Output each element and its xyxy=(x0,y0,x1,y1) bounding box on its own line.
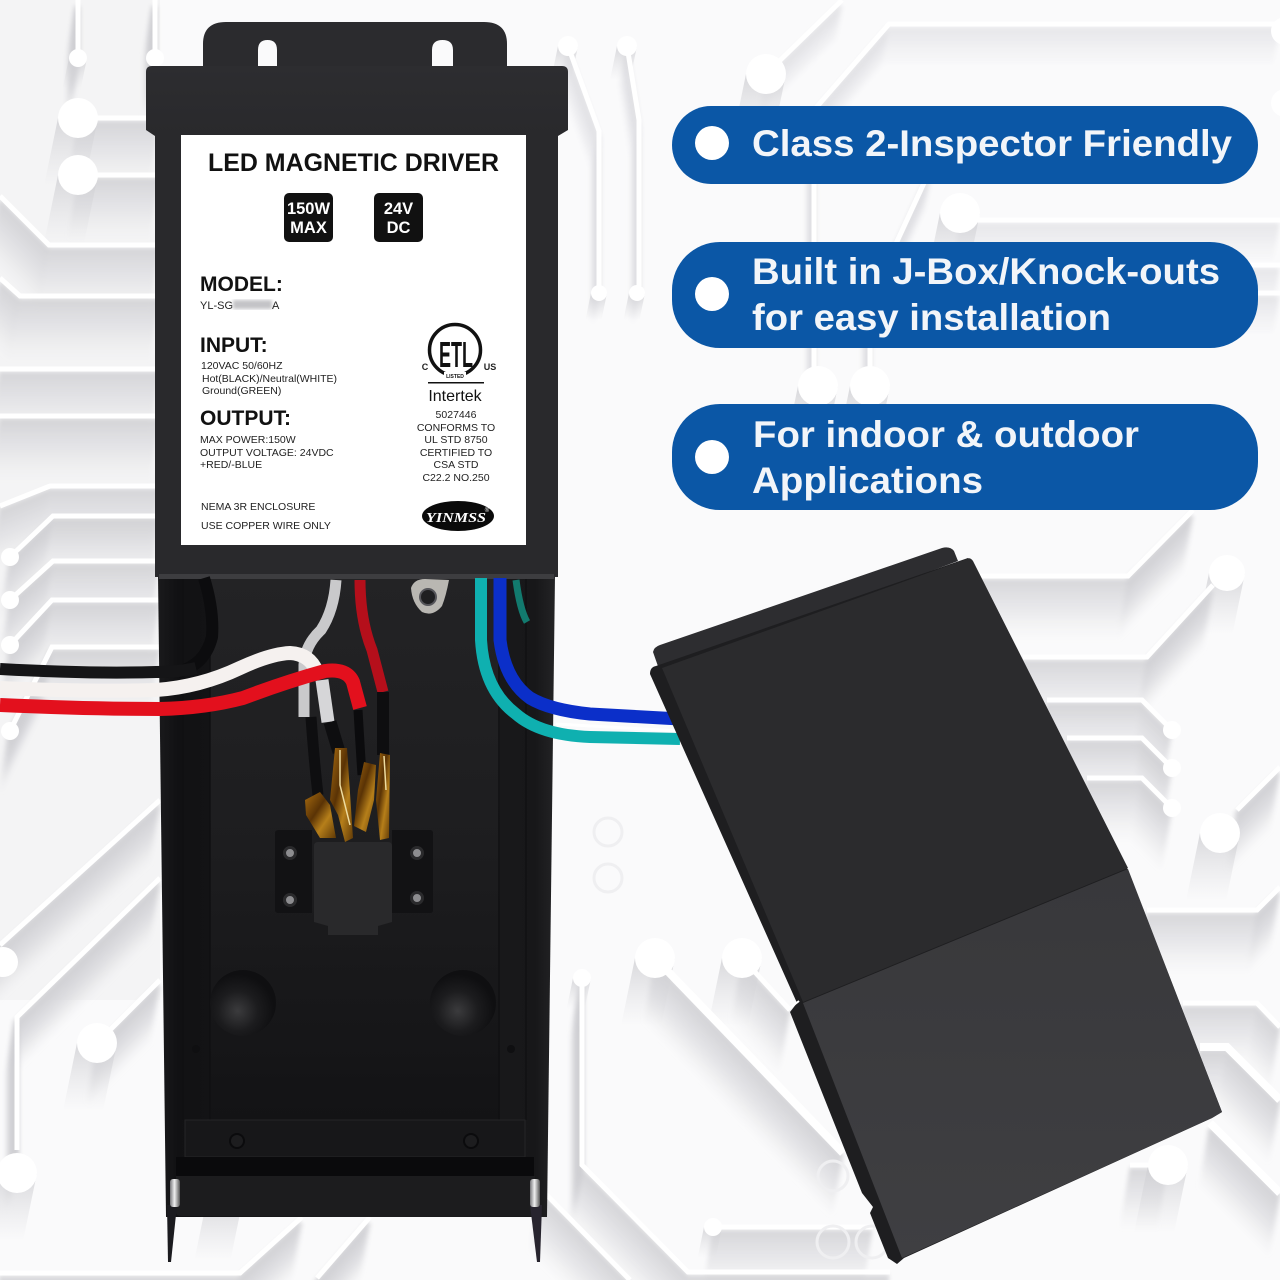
output block: +RED/-BLUE xyxy=(200,459,262,471)
model block: MODEL: xyxy=(200,273,283,296)
dimple right xyxy=(430,970,496,1036)
pill: For indoor and outdoor: Applications xyxy=(752,460,983,501)
badge: 150W max xyxy=(284,193,333,242)
lid upper panel xyxy=(662,558,1128,1002)
red wire xyxy=(0,670,360,709)
detached lid xyxy=(650,547,1222,1264)
ETL mark xyxy=(422,324,496,405)
Yinmss logo: ® xyxy=(485,507,490,514)
input block: Hot(BLACK)/Neutral(WHITE) xyxy=(202,373,337,385)
lid lower panel xyxy=(803,869,1222,1258)
pill: Built in J-Box/Knock-outs: Built in J-Box/Knock-outs xyxy=(752,251,1220,292)
certification text: UL STD 8750 xyxy=(424,434,488,446)
ETL mark: Intertek xyxy=(428,388,483,405)
input wires inside housing xyxy=(178,578,383,795)
lid side edge xyxy=(650,558,1222,1264)
model block xyxy=(200,273,283,312)
gold insulated crimps xyxy=(305,748,390,842)
output block: OUTPUT VOLTAGE: 24VDC xyxy=(200,447,334,459)
black wire xyxy=(0,668,196,673)
output block: MAX POWER:150W xyxy=(200,434,296,446)
certification text: CSA STD xyxy=(434,459,479,471)
pill: Class 2-Inspector Friendly xyxy=(672,106,1258,184)
certification text: C22.2 NO.250 xyxy=(422,472,490,484)
lid hinge highlight xyxy=(790,1001,799,1008)
badge: 24V DC: DC xyxy=(387,219,410,237)
enclosure notes: USE COPPER WIRE ONLY xyxy=(201,520,331,532)
model block: A xyxy=(272,300,280,312)
grounding screw xyxy=(411,579,449,614)
input block: 120VAC 50/60HZ xyxy=(201,360,283,372)
pill: Built in J-Box/Knock-outs: for easy installation xyxy=(752,297,1111,338)
driver enclosure xyxy=(146,22,568,1262)
white wire xyxy=(0,653,317,691)
lower open housing xyxy=(158,575,555,1217)
enclosure notes xyxy=(201,501,331,532)
pill: Class 2-Inspector Friendly: Class 2-Inspector Friendly xyxy=(752,123,1232,164)
pill: Built in J-Box/Knock-outs xyxy=(672,242,1258,348)
badge: 150W max: MAX xyxy=(290,219,327,237)
certification text: CERTIFIED TO xyxy=(420,447,492,459)
input block: INPUT: xyxy=(200,334,268,357)
label panel xyxy=(181,135,526,545)
pill: For indoor and outdoor: For indoor & outdoor xyxy=(753,414,1139,455)
dimple left xyxy=(210,970,276,1036)
ETL mark: ETL xyxy=(439,334,473,375)
Yinmss logo: YINMSS xyxy=(426,511,486,526)
certification text: 5027446 xyxy=(436,409,477,421)
top cap and upper body xyxy=(146,66,568,579)
input block: Ground(GREEN) xyxy=(202,385,281,397)
ETL mark: LISTED xyxy=(446,374,464,380)
input block xyxy=(200,334,337,397)
model block: YL-SG xyxy=(200,300,233,312)
label title: LED MAGNETIC DRIVER xyxy=(208,149,499,177)
certification text: CONFORMS TO xyxy=(417,422,495,434)
output wires xyxy=(481,578,680,739)
mounting bracket xyxy=(203,22,507,70)
lid back tab xyxy=(653,547,958,672)
ETL mark: C xyxy=(422,362,429,372)
badge: 24V DC xyxy=(374,193,423,242)
Yinmss logo xyxy=(422,501,494,531)
hinge pins and fins xyxy=(167,1179,542,1262)
badge: 24V DC: 24V xyxy=(384,200,413,218)
certification text xyxy=(417,409,495,484)
output block xyxy=(200,407,334,471)
output block: OUTPUT: xyxy=(200,407,291,430)
pill: For indoor and outdoor xyxy=(672,404,1258,510)
terminal block xyxy=(275,830,433,935)
badge: 150W max: 150W xyxy=(287,200,330,218)
enclosure notes: NEMA 3R ENCLOSURE xyxy=(201,501,315,513)
ETL mark: US xyxy=(484,362,496,372)
